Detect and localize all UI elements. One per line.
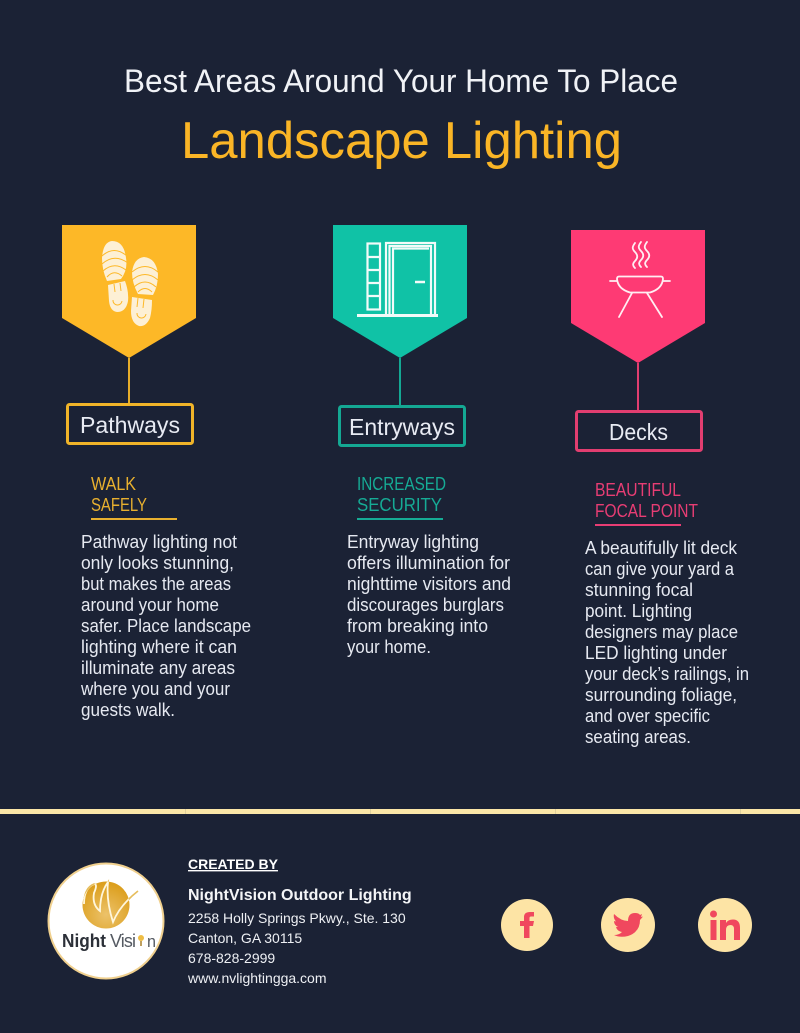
footer contact text: 2258 Holly Springs Pkwy., Ste. 130 [188,910,406,926]
logo [48,864,164,978]
body text: and over specific [585,706,710,726]
subheading: SAFELY [91,495,147,515]
body text: point. Lighting [585,601,692,621]
subheading [595,480,698,526]
body text [347,532,511,657]
connector line [128,358,130,404]
body text: LED lighting under [585,643,727,663]
connector line [399,358,401,406]
body text: nighttime visitors and [347,574,511,594]
icon: pathways pennant [62,225,196,358]
logo wordmark: n [147,932,156,951]
logo wordmark: Night [62,931,106,951]
title [124,63,678,170]
body text: offers illumination for [347,553,510,573]
footer contact text: www.nvlightingga.com [187,970,327,986]
logo wordmark: Visi [110,931,136,951]
subheading: FOCAL POINT [595,501,698,521]
logo wordmark [62,931,156,951]
body text: guests walk. [81,700,175,720]
body text: from breaking into [347,616,488,636]
subheading [91,474,177,520]
icon: decks pennant [571,230,705,363]
icon: logo sun [82,882,138,928]
body text: around your home [81,595,219,615]
label box: Decks: Decks [609,419,668,445]
subheading: WALK [91,474,136,494]
body text: surrounding foliage, [585,685,737,705]
label box: Decks [576,412,702,450]
icon: grill [610,242,670,317]
body text: only looks stunning, [81,553,234,573]
body text: lighting where it can [81,637,237,657]
label box: Pathways: Pathways [80,412,180,438]
title: Best Areas Around Your Home To Place [124,63,678,99]
footer contact text: Canton, GA 30115 [188,930,302,946]
connector line [637,363,639,411]
body text: discourages burglars [347,595,504,615]
body text: seating areas. [585,727,691,747]
body text: Pathway lighting not [81,532,237,552]
subheading [357,474,446,520]
subheading: INCREASED [357,474,446,494]
label box: Entryways: Entryways [349,414,455,440]
body text: safer. Place landscape [81,616,251,636]
subheading: BEAUTIFUL [595,480,681,500]
footer contact text: 678-828-2999 [188,950,275,966]
footer contact text: CREATED BY [188,856,279,872]
footer contact text [187,856,412,986]
footer divider [0,809,800,814]
body text [585,538,749,747]
icon: entryways pennant [333,225,467,358]
panel: decks [571,230,749,747]
label box: Pathways [68,404,192,444]
body text [80,532,251,720]
body text: A beautifully lit deck [585,538,738,558]
body text: your deck’s railings, in [585,664,749,684]
label box: Entryways [340,406,464,446]
body text: your home. [347,637,431,657]
panel: pathways [62,225,251,720]
icon: door [357,243,438,316]
icon: twitter [601,898,655,952]
icon: facebook [501,899,553,951]
subheading: SECURITY [357,495,442,515]
body text: can give your yard a [585,559,735,579]
panel: entryways [333,225,511,657]
footer contact text: NightVision Outdoor Lighting [188,887,412,904]
body text: but makes the areas [81,574,231,594]
body text: Entryway lighting [347,532,479,552]
body text: designers may place [585,622,738,642]
title: Landscape Lighting [181,112,622,170]
body text: where you and your [80,679,230,699]
icon: linkedin [698,898,752,952]
icon: footprints [102,241,158,326]
body text: stunning focal [585,580,693,600]
body text: illuminate any areas [81,658,235,678]
